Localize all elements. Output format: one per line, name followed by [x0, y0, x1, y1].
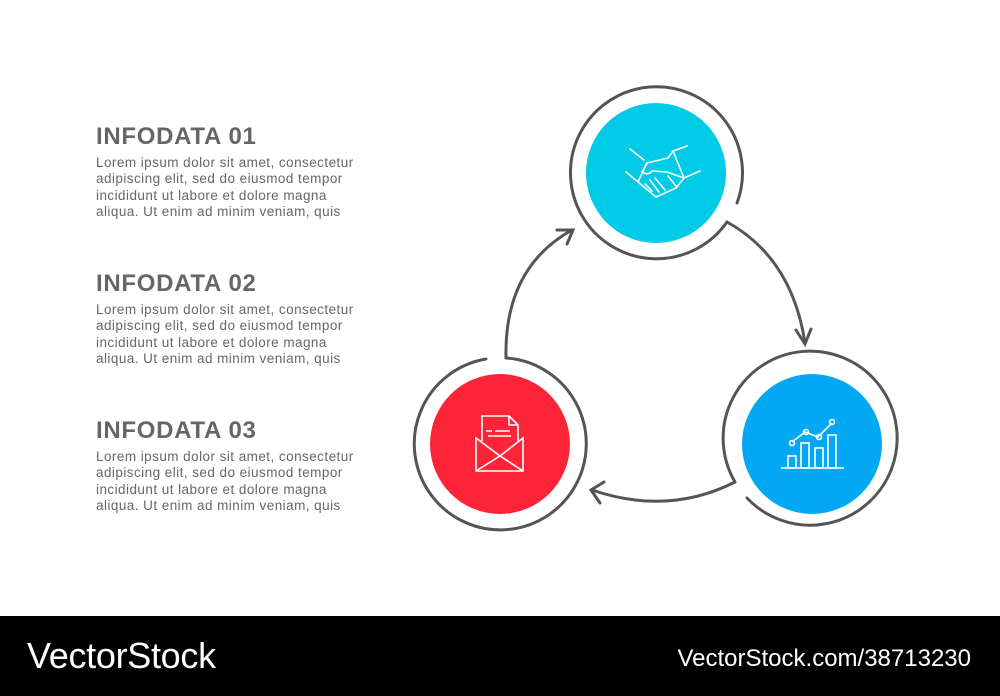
arrow top to right — [727, 222, 811, 344]
text block 01: incididunt ut labore et dolore magna — [96, 188, 327, 203]
footer id: VectorStock.com/38713230 — [677, 645, 971, 672]
text block 02: aliqua. Ut enim ad minim veniam, quis — [96, 351, 341, 366]
footer logo: VectorStock — [27, 635, 216, 676]
text block 01: adipiscing elit, sed do eiusmod tempor — [96, 171, 343, 186]
circle bottom left: mail — [430, 374, 570, 514]
arrow right to left — [591, 482, 735, 503]
footer bar — [0, 616, 1000, 696]
text block 03 — [96, 417, 354, 513]
text block 02: incididunt ut labore et dolore magna — [96, 335, 327, 350]
text block 03: adipiscing elit, sed do eiusmod tempor — [96, 465, 343, 480]
text block 03: INFODATA 03 — [96, 417, 257, 444]
circle top: handshake — [586, 103, 726, 243]
text block 01: INFODATA 01 — [96, 123, 257, 150]
circle bottom right: chart — [742, 374, 882, 514]
text block 03: aliqua. Ut enim ad minim veniam, quis — [96, 498, 341, 513]
text block 03: incididunt ut labore et dolore magna — [96, 482, 327, 497]
ring top — [570, 87, 742, 259]
arrow left to top — [506, 230, 573, 358]
ring bottom left — [414, 358, 586, 530]
text block 03: Lorem ipsum dolor sit amet, consectetur — [96, 449, 354, 464]
text block 02: INFODATA 02 — [96, 270, 257, 297]
text block 02: adipiscing elit, sed do eiusmod tempor — [96, 318, 343, 333]
text block 01: Lorem ipsum dolor sit amet, consectetur — [96, 155, 354, 170]
ring bottom right — [723, 351, 897, 525]
text block 01 — [96, 123, 354, 219]
text block 01: aliqua. Ut enim ad minim veniam, quis — [96, 204, 341, 219]
text block 02 — [96, 270, 354, 366]
text block 02: Lorem ipsum dolor sit amet, consectetur — [96, 302, 354, 317]
